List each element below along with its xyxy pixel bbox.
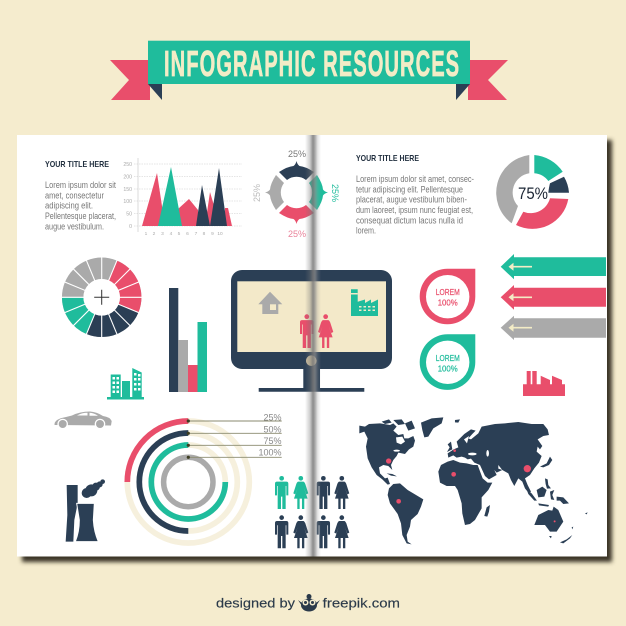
ring percentages: 25%	[252, 184, 262, 202]
monitor stand	[259, 365, 364, 392]
x axis labels: 3	[161, 231, 164, 237]
ring labels: 50%	[263, 424, 282, 434]
y axis labels: 0	[129, 224, 132, 230]
monitor body	[231, 270, 392, 369]
right heading: YOUR TITLE HERE	[356, 153, 419, 163]
arrow: pink	[501, 285, 606, 310]
ring percentages	[252, 149, 340, 239]
y axis labels	[123, 162, 132, 230]
x axis labels: 8	[203, 231, 206, 237]
left paragraph: adipiscing elit.	[45, 201, 93, 211]
y axis labels: 250	[123, 162, 132, 168]
monitor	[231, 270, 392, 392]
x axis labels: 6	[186, 231, 189, 237]
green slice	[534, 155, 563, 181]
ring percentages: 25%	[288, 149, 306, 159]
x axis labels: 5	[178, 231, 181, 237]
title banner	[110, 41, 508, 100]
left heading: YOUR TITLE HERE	[45, 159, 109, 169]
grey slice	[496, 155, 529, 223]
green percent badge	[420, 334, 475, 390]
pink badge text	[436, 288, 460, 308]
title: INFOGRAPHIC RESOURCES	[164, 45, 459, 85]
y axis labels: 50	[126, 212, 132, 218]
ring percentages: 25%	[330, 184, 340, 202]
navy peaks	[196, 168, 227, 226]
y axis labels: 150	[123, 187, 132, 193]
right paragraph: Lorem ipsum dolor sit amet, consec-	[356, 174, 474, 184]
green badge text: LOREM	[436, 354, 460, 363]
world map	[359, 417, 588, 544]
icon: pink factory	[523, 371, 565, 396]
icon: man and woman	[300, 314, 333, 348]
green badge text	[436, 354, 460, 374]
grey ring	[164, 457, 213, 507]
right paragraph: dum laoreet, ipsum nunc feugiat est,	[356, 205, 473, 215]
segmented ring	[252, 149, 340, 239]
donut value: 75%	[518, 184, 548, 203]
map location dots	[386, 449, 556, 522]
navy slice	[548, 177, 569, 193]
green ring	[151, 445, 225, 519]
text block: right	[356, 153, 474, 236]
icon: city buildings	[107, 368, 144, 400]
x axis labels: 7	[195, 231, 198, 237]
icon: car	[54, 412, 112, 429]
plus sign	[94, 290, 109, 305]
leader lines	[188, 421, 282, 457]
left ribbon tail	[110, 60, 150, 100]
left paragraph: Lorem ipsum dolor sit	[45, 180, 116, 190]
right segment	[309, 175, 328, 210]
left paragraph: amet, consectetur	[45, 190, 104, 200]
grey bar	[178, 340, 188, 392]
pink bar	[188, 365, 198, 392]
monitor screen	[237, 281, 386, 352]
chimney	[66, 485, 78, 542]
left ribbon fold	[148, 84, 162, 100]
left segment	[265, 175, 284, 210]
bottom segment	[279, 205, 314, 224]
left paragraph	[45, 180, 116, 231]
arrow: grey	[501, 316, 606, 340]
navy figures	[275, 476, 349, 548]
green peak	[158, 167, 182, 226]
footer credit	[216, 594, 400, 612]
pink badge text: LOREM	[436, 288, 460, 297]
ring labels: 100%	[258, 447, 282, 457]
banner band	[148, 41, 470, 84]
arrow: green	[501, 254, 606, 279]
top segment	[279, 161, 314, 180]
left paragraph: augue vestibulum.	[45, 221, 104, 231]
x axis labels: 9	[211, 231, 214, 237]
area chart	[123, 158, 242, 237]
open book page	[17, 135, 607, 556]
icon: factory	[351, 289, 378, 316]
right paragraph	[356, 174, 474, 236]
ring labels: 25%	[263, 412, 282, 422]
bar chart	[169, 288, 207, 392]
right paragraph: tetur adipiscing elit. Pellentesque	[356, 184, 463, 194]
page shadow	[22, 140, 612, 562]
right paragraph: consequat dictum lacus nulla id	[356, 215, 463, 225]
green badge text: 100%	[438, 364, 458, 374]
pink slice	[516, 198, 568, 229]
credit text right: freepik.com	[323, 596, 400, 610]
x axis labels: 1	[145, 231, 148, 237]
smoke	[82, 479, 105, 498]
y axis labels: 100	[123, 199, 132, 205]
people pictogram	[275, 476, 349, 548]
navy ring	[139, 433, 188, 531]
pink ring	[127, 421, 188, 482]
x axis labels	[145, 231, 223, 237]
book crease	[305, 135, 321, 556]
y axis labels: 200	[123, 174, 132, 180]
green bar	[198, 322, 207, 392]
radial segmented wheel	[61, 256, 143, 338]
text block: left	[45, 159, 116, 231]
green figures	[275, 476, 308, 509]
right paragraph: lorem.	[356, 226, 376, 236]
navy bar	[169, 288, 178, 392]
x axis labels: 4	[170, 231, 173, 237]
donut chart 75%	[496, 155, 569, 229]
credit text left: designed by	[216, 596, 296, 610]
right ribbon fold	[456, 84, 470, 100]
right paragraph: placerat, augue vestibulum biben-	[356, 195, 467, 205]
cooling tower	[75, 503, 98, 542]
x axis labels: 2	[153, 231, 156, 237]
concentric progress rings	[127, 412, 282, 543]
icon: freepik mascot	[298, 594, 320, 612]
right ribbon tail	[468, 60, 508, 100]
ring labels	[258, 412, 282, 457]
pink peaks	[142, 173, 232, 226]
icon: house	[258, 292, 282, 314]
ring percentages: 25%	[288, 229, 306, 239]
pink badge text: 100%	[438, 299, 458, 308]
x axis labels: 10	[217, 231, 223, 237]
monitor button	[306, 355, 317, 366]
ring labels: 75%	[263, 436, 282, 446]
left paragraph: Pellentesque placerat,	[45, 211, 116, 221]
pink percent badge	[420, 269, 475, 324]
icon: power plant	[66, 479, 105, 542]
